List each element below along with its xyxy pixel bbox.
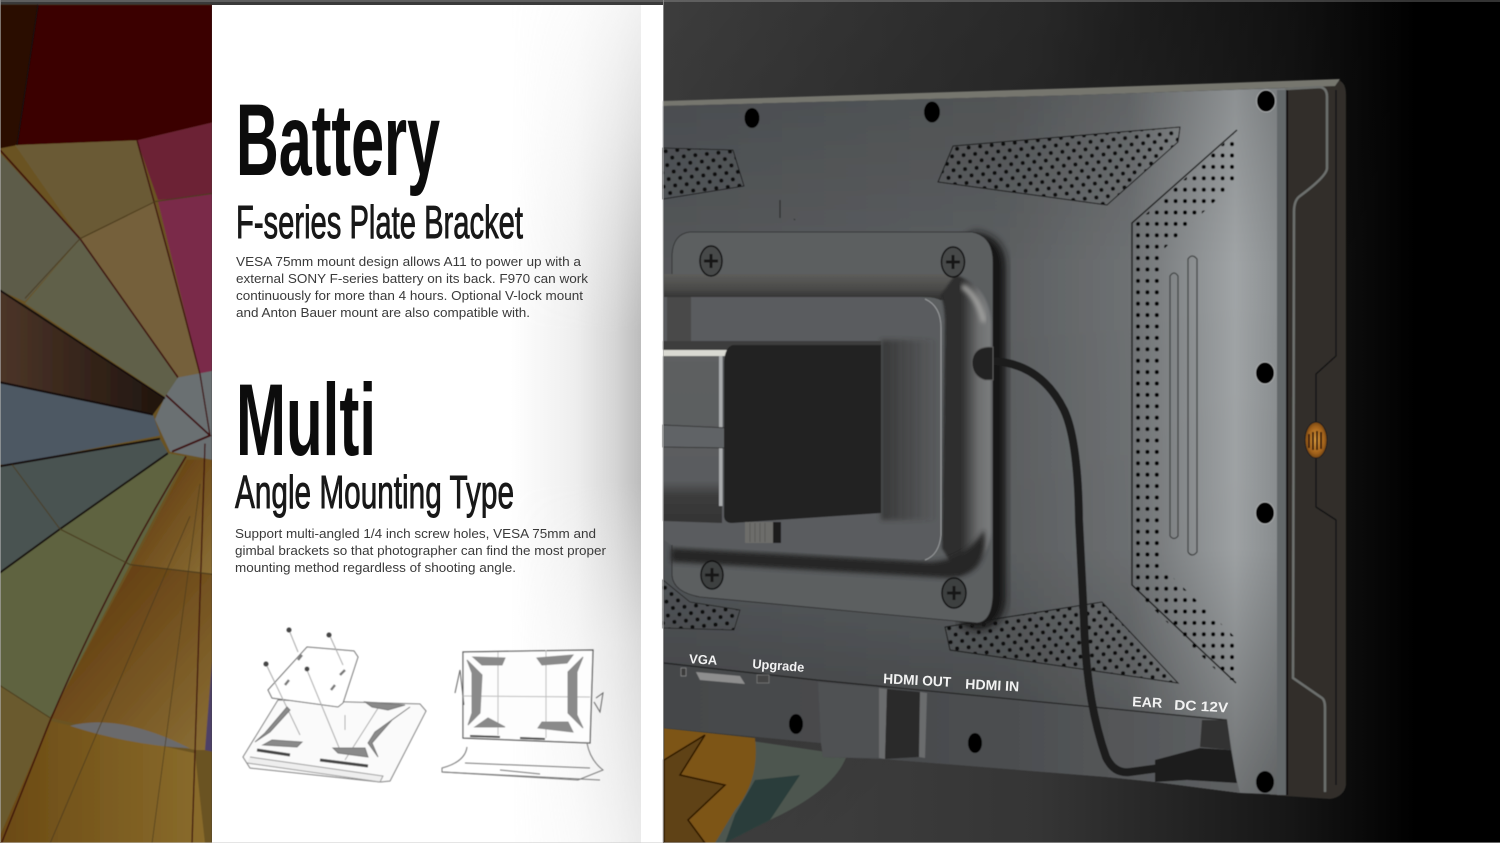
text block: battery description — [236, 255, 589, 320]
balloon glimpse under monitor — [664, 728, 847, 843]
port label: VGA: VGA — [689, 651, 718, 668]
cable plug top — [972, 347, 993, 380]
bracket right band — [940, 275, 991, 575]
screws — [700, 246, 966, 608]
vertical slots — [1170, 256, 1197, 555]
VGA port — [681, 668, 769, 684]
text block: mounting description: gimbal brackets so that photographer can find the most proper — [235, 544, 606, 558]
side frame edge highlight — [1277, 87, 1336, 795]
gold screw socket — [1305, 422, 1327, 458]
bracket inner face — [664, 297, 941, 560]
diagram: VESA plate mounted to monitor — [243, 628, 426, 782]
panel: white text panel — [212, 5, 663, 843]
heading: Battery: Battery — [236, 83, 440, 197]
port label: Upgrade: Upgrade — [752, 656, 805, 675]
subheading: Angle Mounting Type: Angle Mounting Type — [235, 466, 514, 518]
text block: battery description: VESA 75mm mount design allows A11 to power up with a — [236, 255, 581, 269]
text block: battery description: continuously for more than 4 hours. Optional V-lock mount — [236, 289, 584, 303]
text block: mounting description — [235, 527, 606, 575]
diagram: monitor on desktop stand — [442, 650, 603, 780]
back plate — [663, 88, 1286, 795]
perforated patch top-middle — [938, 127, 1180, 205]
inner face shadow from battery — [881, 340, 937, 520]
side frame — [1270, 80, 1346, 799]
small tick marks — [780, 200, 795, 220]
port label: DC 12V: DC 12V — [1174, 697, 1229, 715]
HDMI recess — [818, 682, 927, 759]
text block: mounting description: Support multi-angled 1/4 inch screw holes, VESA 75mm and — [235, 527, 596, 541]
left column of bracket recess — [667, 297, 691, 342]
text block: battery description: external SONY F-series battery on its back. F970 can work — [236, 272, 589, 286]
battery body — [724, 345, 881, 523]
battery metal rail — [663, 341, 881, 523]
subheading: F-series Plate Bracket: F-series Plate Bracket — [236, 196, 523, 248]
battery latch — [745, 522, 781, 543]
port label: EAR: EAR — [1132, 693, 1163, 711]
panel: dark studio background — [663, 0, 1500, 843]
mounting holes — [744, 90, 1276, 793]
port label: HDMI IN: HDMI IN — [965, 676, 1020, 694]
panel: balloon photo — [0, 5, 212, 843]
perforated patch bottom-left — [663, 580, 740, 630]
top rim — [663, 79, 1340, 106]
inner face edge highlight — [925, 299, 941, 560]
band edge — [664, 663, 1227, 720]
perforated patch bottom-middle — [945, 602, 1178, 683]
bracket shadow — [960, 232, 1006, 630]
DC plug — [1155, 720, 1237, 783]
plate shading — [663, 88, 1286, 795]
text block: battery description: and Anton Bauer mount are also compatible with. — [236, 306, 530, 320]
connector band — [664, 663, 1240, 793]
bracket plate — [672, 232, 993, 623]
perforated patch top-left — [663, 148, 744, 199]
heading: Multi: Multi — [236, 363, 376, 477]
bracket bottom shadow band — [671, 530, 985, 578]
frame highlight — [962, 286, 984, 322]
port label: HDMI OUT: HDMI OUT — [883, 670, 952, 690]
monitor back — [663, 79, 1346, 799]
text block: mounting description: mounting method regardless of shooting angle. — [235, 561, 516, 575]
perforated patch right — [1132, 130, 1239, 685]
power cable — [990, 361, 1160, 772]
bracket top band — [664, 274, 975, 300]
